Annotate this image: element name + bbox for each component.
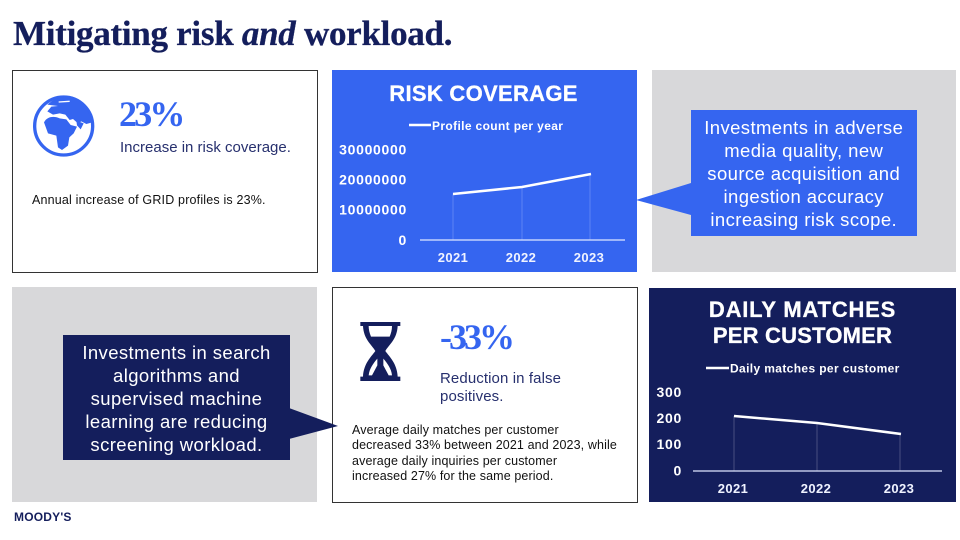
icon: globe: [33, 95, 94, 157]
callout box: algorithms and: [113, 365, 240, 386]
line chart: profile count per year: 2022: [506, 250, 536, 265]
line chart: daily matches per customer: 300: [657, 384, 682, 400]
line chart: daily matches per customer: 2023: [884, 481, 914, 496]
line chart: daily matches per customer: 100: [657, 436, 682, 452]
line chart: daily matches per customer: [656, 362, 942, 496]
callout box: ingestion accuracy: [724, 186, 884, 207]
chart heading: PER CUSTOMER: [713, 323, 892, 348]
callout box: [690, 110, 917, 236]
callout box: source acquisition and: [707, 163, 900, 184]
title: Mitigating risk and workload.: [13, 14, 452, 53]
body text: [352, 423, 617, 483]
line chart: profile count per year: 0: [398, 232, 407, 248]
callout box: supervised machine: [91, 388, 262, 409]
panel: false positives stat: [332, 287, 638, 503]
line chart: daily matches per customer: Daily matches per customer: [730, 362, 900, 376]
panel: daily matches chart: [649, 288, 956, 502]
stat label: Reduction in false: [440, 370, 561, 386]
body text: decreased 33% between 2021 and 2023, while: [352, 438, 617, 452]
chart heading: [709, 297, 896, 348]
line chart: profile count per year: 30000000: [339, 142, 407, 158]
callout box: learning are reducing: [85, 411, 268, 432]
body text: Average daily matches per customer: [352, 423, 559, 437]
line chart: daily matches per customer: 200: [657, 410, 682, 426]
stat label: Increase in risk coverage.: [120, 139, 291, 156]
stat: 23%: 23%: [119, 94, 183, 134]
stat label: positives.: [440, 388, 504, 404]
panel: risk coverage stat: [12, 70, 318, 273]
line chart: profile count per year: Profile count per year: [432, 119, 563, 133]
body text: Annual increase of GRID profiles is 23%.: [32, 193, 266, 207]
callout box: screening workload.: [90, 434, 263, 455]
stat: -33%: -33%: [440, 317, 512, 357]
callout: screening workload: [63, 335, 338, 460]
line chart: daily matches per customer: 0: [674, 462, 682, 478]
panel: workload callout background: [12, 287, 317, 502]
line chart: profile count per year: 10000000: [339, 202, 407, 218]
callout box: Investments in search: [82, 342, 271, 363]
callout box: media quality, new: [724, 140, 883, 161]
callout: risk scope: [637, 110, 917, 236]
line chart: daily matches per customer: 2022: [801, 481, 831, 496]
body text: average daily inquiries per customer: [352, 454, 557, 468]
callout box: Investments in adverse: [704, 117, 903, 138]
stat label: [440, 370, 561, 404]
callout pointer: [637, 183, 691, 215]
line chart: profile count per year: 20000000: [339, 172, 407, 188]
line chart: profile count per year: 2023: [574, 250, 604, 265]
line chart: profile count per year: [339, 119, 625, 265]
icon: hourglass: [360, 322, 400, 381]
line chart: daily matches per customer: 2021: [718, 481, 748, 496]
chart heading: RISK COVERAGE: [389, 81, 578, 106]
callout box: [63, 335, 290, 460]
panel: risk callout background: [652, 70, 956, 272]
callout pointer: [290, 408, 338, 439]
body text: increased 27% for the same period.: [352, 469, 553, 483]
chart heading: DAILY MATCHES: [709, 297, 896, 322]
logo: Moody's: MOODY'S: [14, 510, 72, 524]
panel: risk coverage chart: [332, 70, 637, 272]
callout box: increasing risk scope.: [710, 209, 897, 230]
line chart: profile count per year: 2021: [438, 250, 468, 265]
